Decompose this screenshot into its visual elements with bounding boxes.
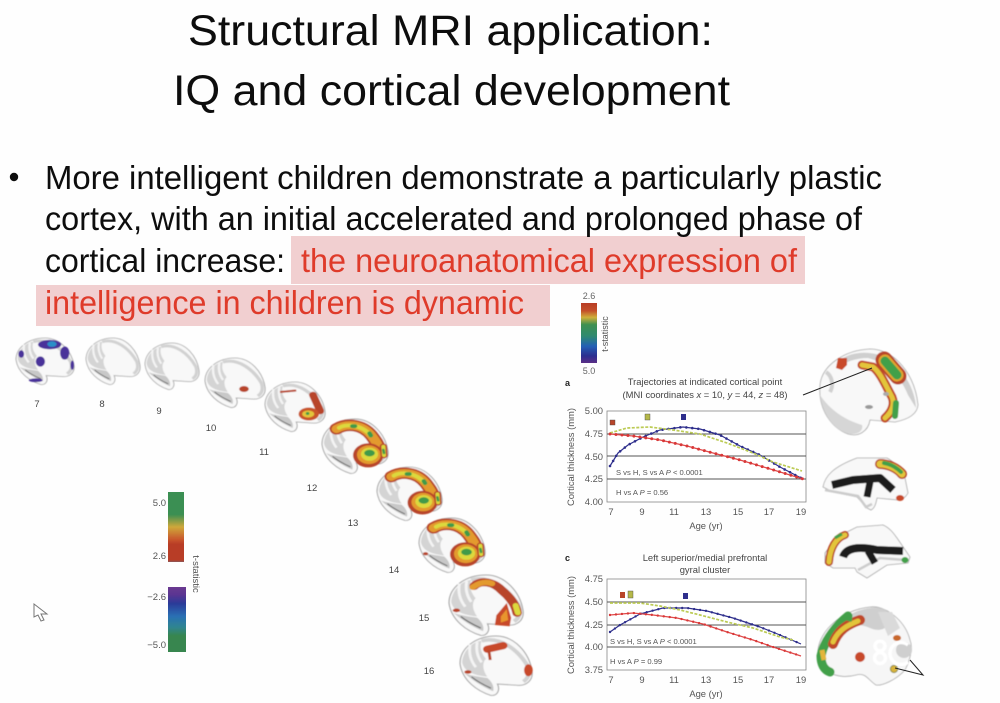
chart c: left superior/medial prefrontal gyral cluster: 4.75 [585,573,603,584]
title: Structural MRI application: [188,7,713,55]
bullet text block: the neuroanatomical expression of [301,243,798,280]
chart c: left superior/medial prefrontal gyral cluster: 17 [764,674,774,685]
colour legend: top right: 5.0 [583,366,595,376]
chart c: left superior/medial prefrontal gyral cluster: Left superior/medial prefrontal [643,552,767,563]
chart c: left superior/medial prefrontal gyral cluster: Age (yr) [689,688,723,699]
brain age 14 [419,518,485,572]
chart a: trajectories at indicated cortical point: 19 [796,506,806,517]
brain: upper lateral view [820,349,918,435]
highlight behind red text [36,236,805,326]
brain age 8 [86,338,140,385]
bullet text block: cortex, with an initial accelerated and prolonged phase of [45,201,863,238]
chart c: left superior/medial prefrontal gyral cluster [565,552,806,699]
chart c: left superior/medial prefrontal gyral cluster: H vs A P = 0.99 [610,657,662,666]
chart a: trajectories at indicated cortical point: 11 [669,506,679,517]
chart a: trajectories at indicated cortical point: 13 [701,506,711,517]
chart c: left superior/medial prefrontal gyral cluster: 3.75 [585,664,603,675]
brain: lower lateral view [818,607,912,685]
chart a: trajectories at indicated cortical point: 4.25 [585,473,603,484]
chart a: trajectories at indicated cortical point: (MNI coordinates x = 10, y = 44, z = 48) [623,389,787,400]
chart c: left superior/medial prefrontal gyral cluster: 4.25 [585,619,603,630]
brain age 11 [265,382,325,432]
colour legend: top right [581,291,610,376]
chart a: trajectories at indicated cortical point: Trajectories at indicated cortical point [628,376,783,387]
age labels: 9 [156,406,162,417]
colour legend: left: t-statistic [190,555,201,593]
chart c: left superior/medial prefrontal gyral cluster: 7 [608,674,614,685]
bullet text block: More intelligent children demonstrate a particularly plastic [45,160,882,197]
brain age 16 [460,636,533,695]
chart a: trajectories at indicated cortical point: 9 [639,506,645,517]
title: IQ and cortical development [173,67,730,115]
bullet text block [10,160,882,322]
chart c: left superior/medial prefrontal gyral cluster: gyral cluster [680,564,730,575]
brain age 15 [449,575,523,635]
chart a: trajectories at indicated cortical point: 5.00 [585,405,603,416]
chart a: trajectories at indicated cortical point: 4.50 [585,451,603,462]
icon: mouse cursor [34,604,47,621]
chart a: trajectories at indicated cortical point [565,376,806,531]
chart c: left superior/medial prefrontal gyral cluster: 13 [701,674,711,685]
chart a: trajectories at indicated cortical point: 4.75 [585,428,603,439]
colour legend: left: −2.6 [147,592,166,603]
title [173,7,730,115]
brain age 13 [377,467,442,520]
brain age 7 [16,338,74,385]
colour legend: top right: t-statistic [600,316,610,352]
chart a: trajectories at indicated cortical point: 4.00 [585,496,603,507]
age labels: 13 [348,518,358,529]
chart c: left superior/medial prefrontal gyral cluster: 15 [733,674,743,685]
chart a: trajectories at indicated cortical point: Cortical thickness (mm) [565,408,576,506]
leader line from chart a to brain [803,368,872,395]
age labels: 16 [424,666,434,677]
age labels: 14 [389,565,399,576]
chart c: left superior/medial prefrontal gyral cluster: 9 [639,674,645,685]
chart c: left superior/medial prefrontal gyral cluster: Cortical thickness (mm) [565,576,576,674]
colour legend: top right: 2.6 [583,291,595,301]
colour legend: left: 2.6 [153,551,166,562]
chart c: left superior/medial prefrontal gyral cluster: 4.00 [585,641,603,652]
chart a: trajectories at indicated cortical point: 17 [764,506,774,517]
age labels: 10 [206,423,216,434]
chart a: trajectories at indicated cortical point: a [565,378,571,388]
chart c: left superior/medial prefrontal gyral cluster: 4.50 [585,596,603,607]
panel: right-hand brain views [818,349,918,685]
age labels: 11 [259,447,269,458]
colour legend: left: 5.0 [153,498,166,509]
chart c: left superior/medial prefrontal gyral cluster: 19 [796,674,806,685]
brain age 10 [205,358,265,408]
colour legend: left: −5.0 [147,640,166,651]
brain age 12 [322,419,388,473]
brain: upper medial view [823,458,908,510]
chart c: left superior/medial prefrontal gyral cluster: 11 [669,674,679,685]
bullet text block: cortical increase: [45,243,285,280]
age labels: 8 [99,399,105,410]
age labels [34,399,434,677]
brain: lower medial view [825,525,910,578]
chart c: left superior/medial prefrontal gyral cluster: c [565,553,570,563]
chart c: left superior/medial prefrontal gyral cluster: S vs H, S vs A P < 0.0001 [610,637,697,646]
brain age 9 [145,343,199,390]
leader lines to lower brain target [895,660,923,675]
age labels: 15 [419,613,429,624]
bullet text block: intelligence in children is dynamic [45,285,524,322]
colour legend: left [147,492,201,652]
age labels: 7 [34,399,40,410]
watermark [874,641,908,664]
panel: brain development series, ages 7 to 16 [16,338,533,695]
chart a: trajectories at indicated cortical point: 15 [733,506,743,517]
chart a: trajectories at indicated cortical point: S vs H, S vs A P < 0.0001 [616,468,703,477]
chart a: trajectories at indicated cortical point: 7 [608,506,614,517]
chart a: trajectories at indicated cortical point: H vs A P = 0.56 [616,488,668,497]
chart a: trajectories at indicated cortical point: Age (yr) [689,520,723,531]
age labels: 12 [307,483,317,494]
